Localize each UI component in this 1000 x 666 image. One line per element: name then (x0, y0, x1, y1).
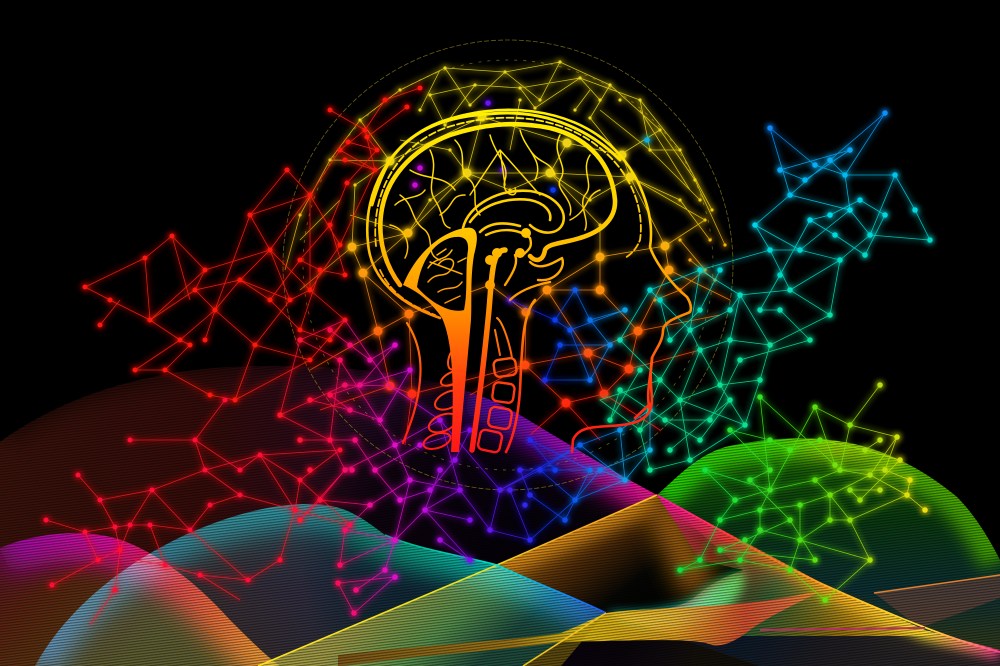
skull inner band (375, 118, 641, 315)
network: green and yellow right cluster (680, 385, 925, 600)
wave group (0, 340, 1000, 666)
vertebrae right column (477, 318, 517, 453)
network: red lower-left cluster (46, 400, 350, 625)
brain and head outline (367, 110, 691, 453)
cerebellum interior (417, 237, 468, 311)
wave: lower right tail (874, 575, 1000, 628)
chin and throat detail (572, 358, 652, 452)
wave: large red back wave (0, 340, 1000, 666)
line texture over waves (0, 360, 1000, 666)
brain gyri (390, 130, 600, 260)
network: sphere nodes around head (285, 62, 730, 445)
corpus callosum (463, 191, 564, 233)
wave: magenta left hump (0, 533, 280, 666)
wave: teal hump (35, 504, 606, 666)
sphere outline (283, 40, 733, 490)
cerebrum outline (380, 124, 615, 285)
brainstem nodes (485, 228, 531, 290)
cerebellum folds (428, 249, 466, 303)
vertebrae left column (422, 345, 467, 452)
anterior brainstem (472, 250, 505, 450)
cerebellum and brainstem (403, 228, 477, 452)
wave: yellow left fold (258, 565, 606, 666)
wave: green right wave (657, 438, 1000, 650)
thalamus and pituitary (486, 230, 563, 300)
network: red left cluster (85, 88, 420, 400)
network: magenta to blue centre cluster (280, 103, 650, 613)
wave: orange middle fold (499, 496, 743, 606)
wave: right orange and red fold (600, 490, 1000, 666)
anterior thin line (506, 300, 535, 452)
wave: bottom yellow fold to the valley (523, 613, 606, 666)
wave: bright ridge lines (258, 495, 1000, 666)
network: blue to teal upper right cluster (600, 113, 930, 470)
wave: cyan valley curve (606, 570, 745, 630)
wave: low orange band (338, 587, 829, 666)
head profile (367, 110, 691, 440)
neck back line (403, 323, 420, 443)
skull top arc (372, 113, 620, 205)
